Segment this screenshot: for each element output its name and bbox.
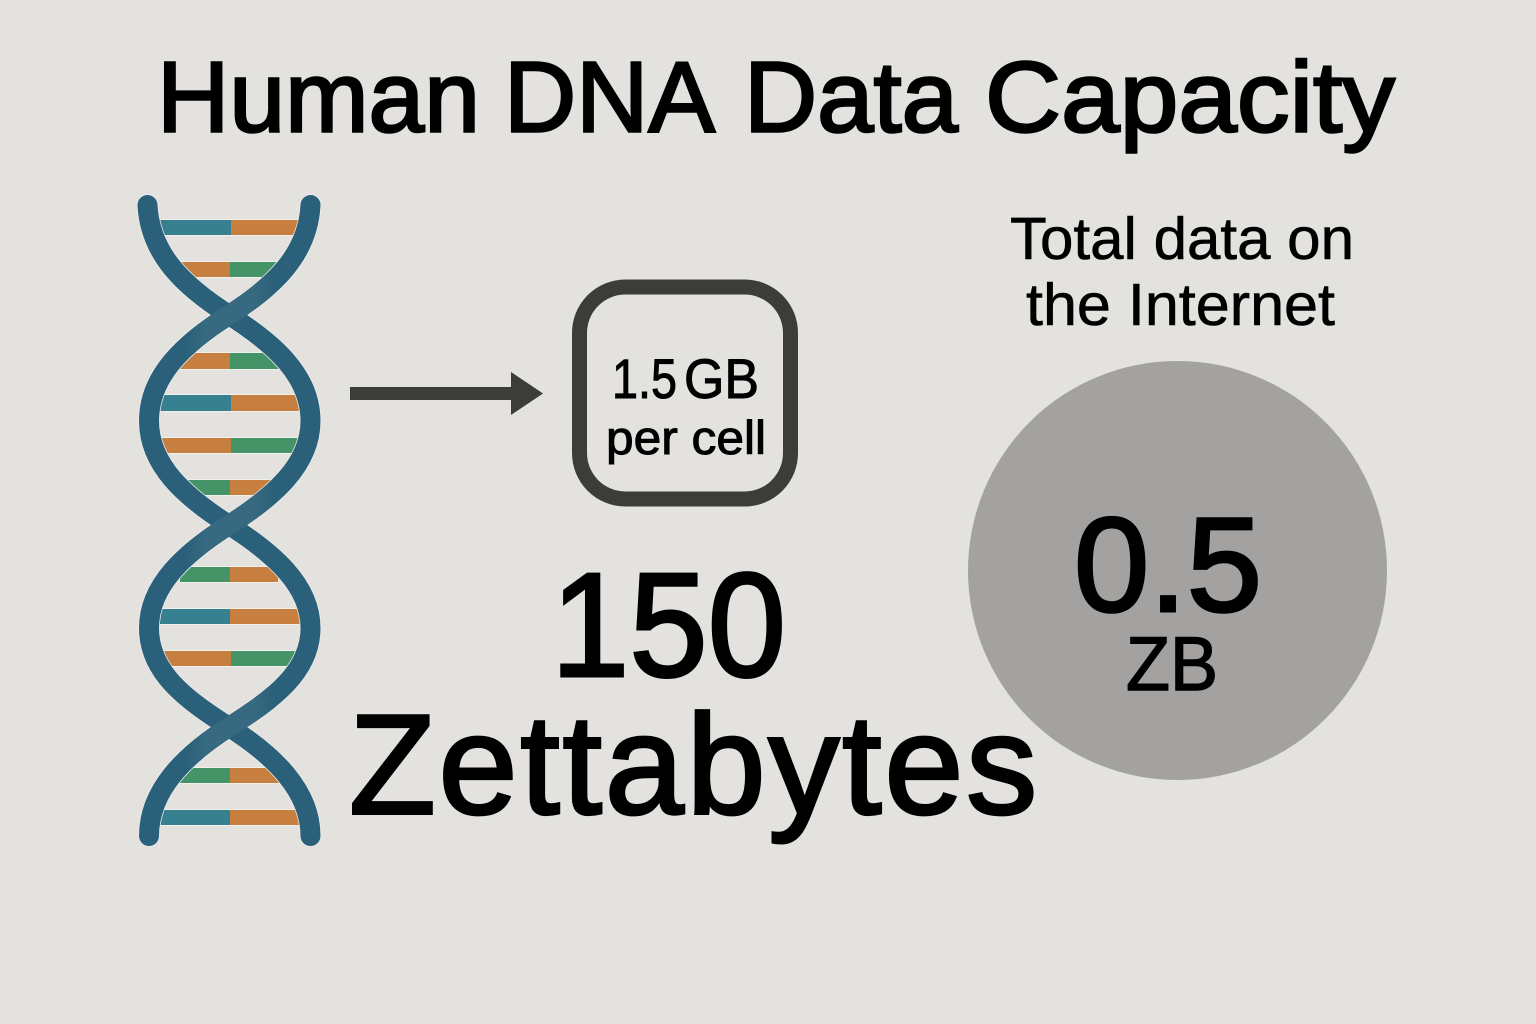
title: Capacity [985, 42, 1395, 154]
headline value: 150 Zettabytes [349, 543, 1040, 844]
icon: DNA double helix [148, 205, 310, 836]
label: total data on the Internet [1010, 206, 1354, 338]
headline value: 150 Zettabytes: Zettabytes [349, 686, 1040, 844]
label: total data on the Internet: Total data on [1010, 206, 1354, 272]
data box: 1.5 GB per cell: per cell [606, 411, 766, 464]
label: total data on the Internet: the Internet [1026, 272, 1335, 338]
circle: 0.5 ZB [968, 361, 1387, 780]
title: DNA [504, 42, 715, 154]
base pair rungs [158, 219, 300, 826]
title: Human [157, 42, 480, 154]
data box: 1.5 GB per cell: GB [684, 347, 759, 410]
data box: 1.5 GB per cell [580, 287, 790, 499]
circle: 0.5 ZB: ZB [1126, 622, 1218, 707]
headline value: 150 Zettabytes: 150 [551, 543, 786, 708]
title: Data [744, 42, 958, 154]
helix strands [148, 205, 310, 836]
title [157, 42, 1395, 154]
data box: 1.5 GB per cell: 1.5 [612, 347, 677, 410]
circle: 0.5 ZB: 0.5 [1074, 491, 1262, 640]
arrow [350, 372, 543, 415]
